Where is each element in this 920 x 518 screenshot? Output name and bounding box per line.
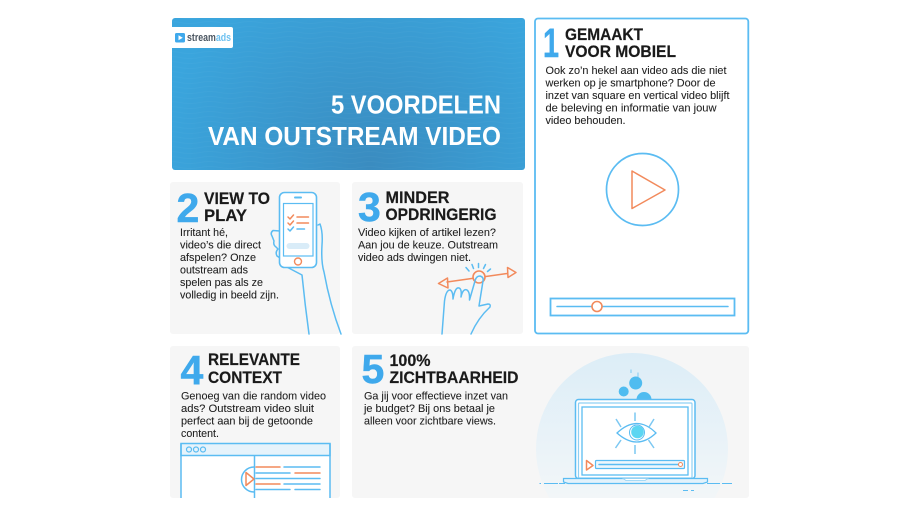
icon: hand holding phone — [271, 192, 341, 334]
body text — [180, 227, 279, 302]
panel: 2 view to play — [170, 182, 341, 334]
number 2: 2 — [176, 185, 199, 231]
body text: inzet van square en vertical video blijft — [546, 90, 730, 102]
panel: 5 100% zichtbaarheid — [352, 346, 749, 498]
body text — [545, 65, 730, 127]
icon: play button — [606, 154, 678, 226]
body text: werken op je smartphone? Door de — [545, 78, 716, 90]
body text: Irritant hé, — [180, 227, 228, 239]
panel: hero banner — [172, 18, 525, 170]
logo: streamads: streamads — [187, 32, 231, 44]
body text: alleen voor zichtbare views. — [364, 416, 496, 428]
body text: spelen pas als ze — [180, 277, 263, 289]
body text: ads? Outstream video sluit — [181, 403, 315, 415]
heading: VOOR MOBIEL — [565, 42, 676, 61]
heading: OPDRINGERIG — [386, 205, 496, 224]
laptop — [564, 400, 708, 484]
logo: streamads — [172, 27, 233, 48]
panel: 4 relevante context — [170, 346, 340, 498]
heading: ZICHTBAARHEID — [390, 368, 518, 387]
title — [208, 90, 501, 151]
heading: CONTEXT — [208, 368, 283, 387]
heading — [565, 25, 676, 61]
body text: Genoeg van die random video — [181, 390, 326, 402]
heading: MINDER — [386, 188, 450, 207]
icon: browser window with video — [181, 444, 330, 498]
heading — [390, 351, 518, 387]
body text: video’s die direct — [180, 240, 262, 252]
heading — [386, 188, 496, 224]
number 4: 4 — [180, 347, 204, 393]
heading — [204, 189, 270, 225]
ground dashes — [540, 484, 732, 490]
body text: perfect aan bij de getoonde — [181, 416, 313, 428]
body text: Ga jij voor effectieve inzet van — [364, 390, 508, 402]
title: 5 VOORDELEN — [331, 90, 501, 120]
icon: swipe arrow — [438, 264, 516, 288]
body text: Video kijken of artikel lezen? — [358, 227, 496, 239]
body text: afspelen? Onze — [180, 252, 256, 264]
panel: 1 gemaakt voor mobiel — [535, 18, 748, 334]
heading: 100% — [390, 351, 430, 370]
heading — [208, 350, 300, 387]
heading: GEMAAKT — [565, 25, 644, 44]
background circle — [536, 353, 728, 498]
body text — [181, 390, 326, 440]
body text: Ook zo’n hekel aan video ads die niet — [546, 65, 727, 77]
heading: PLAY — [204, 206, 248, 225]
number 5: 5 — [362, 346, 384, 392]
body text — [363, 390, 508, 428]
heading: RELEVANTE — [208, 350, 300, 369]
number 3: 3 — [358, 184, 381, 230]
number 1: 1 — [543, 20, 559, 66]
body text — [358, 227, 498, 264]
bubbles — [619, 370, 652, 407]
title: VAN OUTSTREAM VIDEO — [208, 121, 501, 151]
body text: video ads dwingen niet. — [358, 252, 471, 264]
body text: content. — [181, 428, 219, 440]
body text: de beleving en informatie van jouw — [546, 102, 717, 114]
panel: 3 minder opdringerig — [352, 182, 523, 334]
video player bar — [586, 460, 684, 470]
body text: je budget? Bij ons betaal je — [363, 403, 495, 415]
body text: Aan jou de keuze. Outstream — [358, 240, 498, 252]
body text: outstream ads — [180, 264, 248, 276]
video progress bar — [550, 298, 734, 316]
icon: pointing hand — [442, 276, 490, 334]
body text: video behouden. — [546, 115, 626, 127]
illustration: laptop with eye — [536, 353, 732, 498]
eye — [616, 412, 656, 454]
body text: volledig in beeld zijn. — [180, 290, 279, 302]
heading: VIEW TO — [204, 189, 270, 208]
